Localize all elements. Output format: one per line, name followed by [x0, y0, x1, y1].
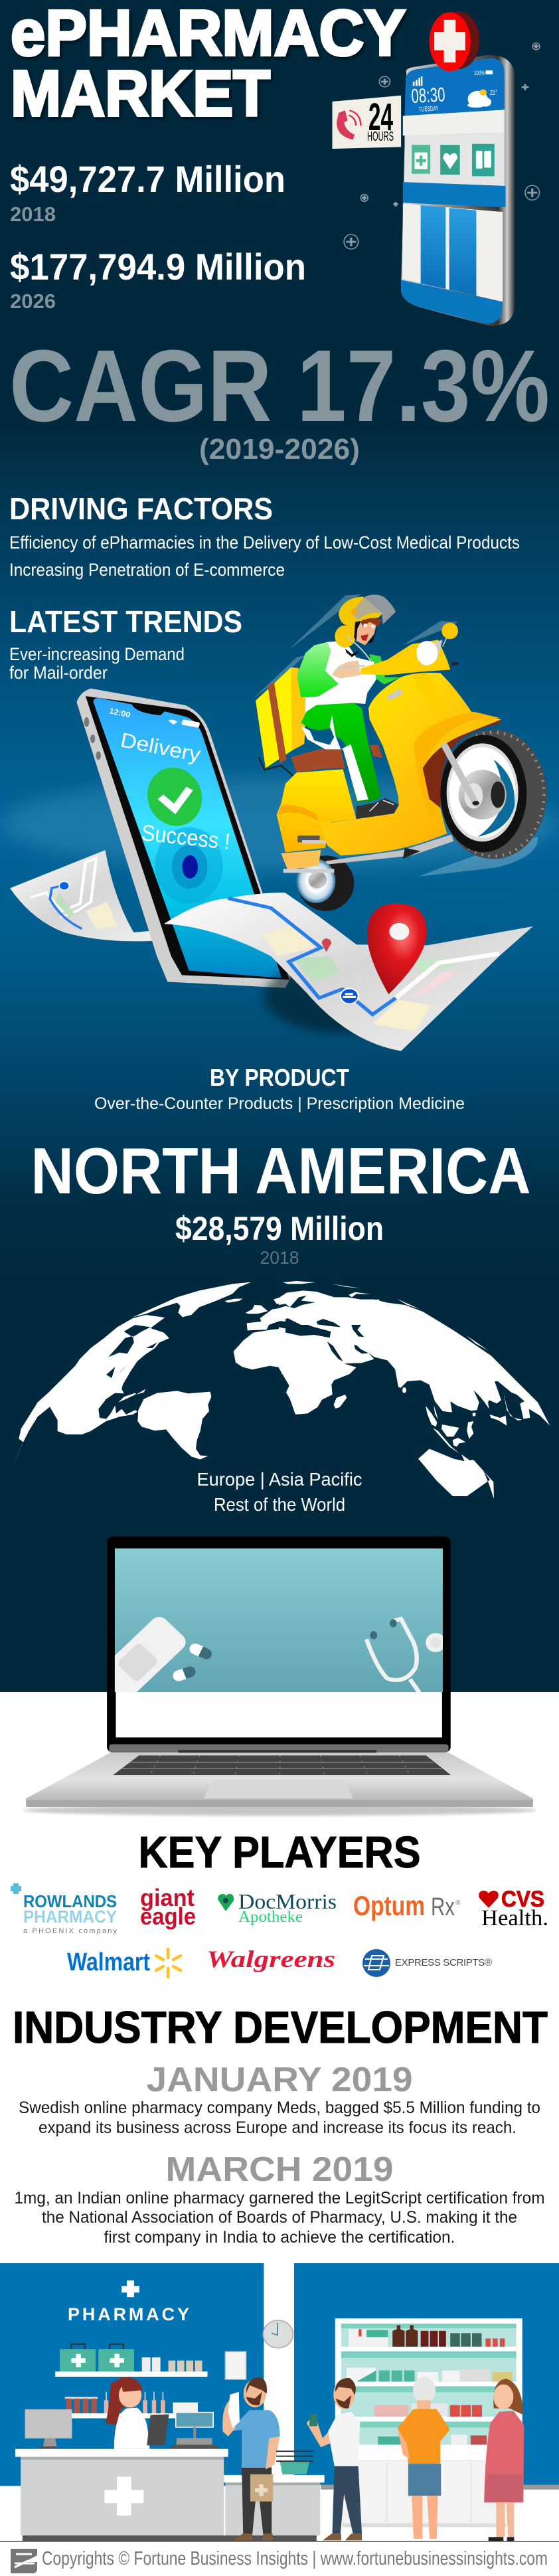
phone text: [411, 70, 497, 114]
illustration: pharmacy phone: [332, 11, 540, 326]
scooter body: [319, 673, 501, 855]
lower drawers: [343, 2460, 507, 2527]
arctic islands: [283, 1281, 488, 1350]
phone screen text: 12:00: [108, 706, 131, 720]
wall left: [0, 2263, 264, 2486]
by product: BY PRODUCT: [210, 1064, 349, 1091]
rider shirt: [305, 641, 376, 713]
west africa: [234, 1328, 285, 1376]
pharmacist: [106, 2377, 150, 2449]
title: [11, 0, 406, 129]
latest trends: LATEST TRENDS: [9, 604, 242, 639]
front wheel: [440, 729, 546, 859]
logo: docmorris: Apotheke: [238, 1909, 303, 1926]
wall right: [294, 2263, 559, 2490]
main counter: [15, 2449, 317, 2541]
lower shelf: [65, 2392, 198, 2419]
laptop base: [26, 1753, 533, 1807]
front fork: [445, 746, 479, 806]
phone text: TUESDAY: [419, 105, 439, 114]
logo: cvs health: Health.: [481, 1906, 548, 1931]
24 hours text: 24: [368, 96, 393, 139]
24 hours text: HOURS: [367, 129, 394, 144]
poster: [225, 2352, 246, 2379]
caribbean: [118, 1389, 145, 1403]
keyboard: [113, 1755, 451, 1775]
icon: phone base: [401, 280, 503, 324]
logo: giant eagle: giant: [140, 1884, 195, 1911]
americas and west europe: [11, 1282, 285, 1470]
logo: optum rx: ®: [455, 1899, 461, 1907]
pregnant customer: [484, 2379, 524, 2541]
phone screen: [94, 698, 281, 978]
southeast asia islands: [426, 1405, 476, 1469]
stat: 2018 market size: [10, 158, 285, 226]
stat: 2026 market size: 2026: [10, 290, 56, 313]
phone body: [76, 689, 291, 988]
stat: 2018 market size: 2018: [10, 203, 56, 226]
medicine boxes top: [349, 2325, 505, 2347]
sri lanka: [402, 1387, 406, 1393]
heading: key players: KEY PLAYERS: [138, 1828, 421, 1877]
pills: [190, 1643, 212, 1660]
scandinavia: [274, 1296, 285, 1304]
mirrors: [335, 623, 458, 661]
medicine boxes lower: [374, 2403, 487, 2445]
development: january 2019: [19, 2061, 540, 2137]
rear body: [277, 769, 357, 852]
customer with paper: [222, 2377, 280, 2540]
logo: rowlands pharmacy: PHARMACY: [23, 1907, 117, 1927]
icon: white awning band: [403, 110, 505, 135]
north america heading: [31, 1134, 531, 1268]
laptop screen: [115, 1549, 443, 1692]
phone screen text: [108, 706, 231, 855]
driving factors: DRIVING FACTORS: [9, 491, 273, 526]
icon: red cross badge: [430, 11, 479, 71]
development: january 2019: Swedish online pharmacy company Meds, bagged $5.5 Million funding to: [19, 2099, 540, 2117]
medicine cabinet: [335, 2318, 522, 2460]
seat: [291, 745, 383, 772]
phone text: 21°: [490, 89, 497, 97]
latest trends: Ever-increasing Demand: [9, 644, 185, 664]
rear wheel: [297, 855, 354, 911]
development: march 2019: MARCH 2019: [166, 2150, 393, 2189]
logo: express scripts: EXPRESS SCRIPTS®: [395, 1957, 492, 1968]
stat: 2018 market size: $49,727.7 Million: [10, 158, 285, 200]
phone text: 100%: [474, 70, 485, 76]
logo: cvs health: CVS: [501, 1887, 544, 1912]
logo: giant eagle: [140, 1884, 196, 1930]
delivery route: [228, 899, 396, 1015]
regions text: Europe | Asia Pacific: [197, 1469, 362, 1490]
rider collar: [345, 649, 359, 657]
development: march 2019: [15, 2150, 544, 2247]
phone ripple and dot: [155, 827, 223, 903]
route vehicle marker: [341, 989, 359, 1003]
CAGR: (2019-2026): [199, 433, 360, 466]
icon: medical plus marks: [344, 43, 540, 249]
north america: [11, 1315, 169, 1470]
rear rack vent: [297, 835, 327, 843]
clipboard: [147, 2415, 169, 2445]
computer monitor: [25, 2409, 72, 2449]
clock: [263, 2320, 293, 2348]
status icons: [168, 719, 200, 728]
pharmacy cross: [121, 2280, 139, 2297]
icon: telephone: [337, 110, 360, 139]
leg shield panel: [412, 673, 447, 715]
front fender: [414, 712, 501, 819]
stat: 2026 market size: $177,794.9 Million: [10, 246, 306, 288]
map blocks: [262, 923, 499, 1031]
title: MARKET: [11, 57, 270, 129]
australia: [418, 1449, 494, 1499]
phone screen text: Delivery: [119, 729, 203, 766]
stat: 2026 market size: [10, 246, 306, 313]
eurasia africa oceania: [279, 1281, 550, 1499]
illustration: scooter rider: [252, 594, 546, 911]
logo: giant eagle: eagle: [140, 1903, 196, 1930]
phone screen text: Success !: [140, 820, 231, 855]
south america: [137, 1391, 211, 1460]
development: january 2019: JANUARY 2019: [146, 2061, 413, 2099]
development: march 2019: 1mg, an Indian online pharmacy garnered the LegitScript certification from: [15, 2189, 544, 2207]
pharmacy sign text: PHARMACY: [68, 2304, 189, 2324]
logo: docmorris: [218, 1889, 337, 1926]
stethoscope: [366, 1619, 443, 1693]
motion streaks: [252, 594, 538, 877]
24 hours text: [367, 96, 394, 144]
north america heading: 2018: [260, 1248, 299, 1268]
eurasia and africa: [279, 1290, 550, 1426]
development: march 2019: first company in India to achieve the certification.: [104, 2228, 455, 2247]
laptop front lip: [26, 1800, 533, 1807]
undercarriage: [281, 835, 453, 873]
medicine boxes middle: [347, 2368, 513, 2381]
map curl left: [10, 850, 167, 941]
logo: rowlands pharmacy: a PHOENIX company: [23, 1927, 117, 1935]
logo: express scripts: [362, 1949, 492, 1977]
logo: walmart: Walmart: [67, 1948, 150, 1976]
upper shelf with kits: [55, 2344, 208, 2377]
greenland: [133, 1282, 251, 1317]
rider near sleeve: [297, 642, 339, 697]
touchpad: [203, 1780, 353, 1798]
illustration: pharmacy scene: [0, 2263, 559, 2541]
regions text: Rest of the World: [214, 1494, 345, 1515]
delivery phone: [76, 689, 291, 988]
logo: cvs health: [479, 1887, 548, 1931]
rear body panel line: [278, 805, 319, 821]
iceland: [224, 1299, 243, 1303]
by product: Over-the-Counter Products | Prescription Medicine: [94, 1094, 465, 1113]
rider head and helmet: [339, 594, 396, 645]
icon: 24 hours sign: [332, 96, 401, 149]
west europe: [247, 1307, 285, 1330]
screen art: [114, 1616, 443, 1692]
footer: [0, 2541, 559, 2573]
logo: optum rx: Rx: [431, 1893, 455, 1921]
icon: shop columns: [403, 204, 503, 302]
bandage: [114, 1616, 186, 1692]
rider trousers: [301, 703, 381, 802]
laptop frame: [107, 1537, 451, 1753]
icon: phone screen top: [404, 58, 505, 116]
delivery box: [256, 667, 307, 776]
logo: walgreens: Walgreens: [206, 1946, 335, 1972]
latest trends: [9, 604, 242, 683]
illustration: laptop: [23, 1537, 536, 1816]
basket: [276, 2451, 313, 2474]
phone text: 08:30: [411, 84, 445, 108]
by product: [94, 1064, 465, 1113]
logo: optum rx: Optum: [353, 1890, 425, 1921]
body vent: [387, 689, 403, 701]
laptop shadow: [23, 1805, 536, 1816]
customer with bottle: [307, 2378, 362, 2540]
madagascar: [334, 1395, 347, 1409]
side counter: [224, 2475, 325, 2535]
main map: [164, 893, 533, 1051]
scooter handlebar: [332, 640, 457, 679]
driving factors: Increasing Penetration of E-commerce: [9, 560, 285, 580]
side buttons: [84, 717, 101, 760]
icon: blue band: [403, 182, 505, 207]
logo: rowlands pharmacy: ROWLANDS: [23, 1891, 117, 1911]
latest trends: for Mail-order: [9, 663, 108, 683]
chart: world map: [11, 1281, 550, 1499]
rider shoe: [357, 798, 398, 819]
uk: [246, 1305, 268, 1314]
development: january 2019: expand its business across Europe and increase its focus its reach.: [39, 2118, 517, 2137]
icon: status and time: [413, 70, 493, 108]
north america heading: $28,579 Million: [175, 1210, 384, 1247]
logo: docmorris: DocMorris: [238, 1889, 337, 1913]
icon: app row: [404, 133, 505, 186]
older customer: [398, 2377, 450, 2539]
logo: rowlands pharmacy: [11, 1883, 117, 1935]
cash register: [171, 2413, 218, 2449]
illustration: delivery phone and map: [10, 689, 533, 1051]
rider far sleeve: [370, 654, 400, 685]
east asia islands: [490, 1393, 522, 1426]
success check: [143, 764, 206, 829]
location pin: [322, 903, 427, 994]
regions text: [197, 1469, 362, 1515]
development: march 2019: the National Association of Boards of Pharmacy, U.S. making it the: [42, 2208, 517, 2227]
icon: phone body: [401, 55, 515, 326]
fender underside: [423, 719, 501, 808]
driving factors: [9, 491, 520, 580]
icon: fortune logo: [11, 2549, 37, 2573]
